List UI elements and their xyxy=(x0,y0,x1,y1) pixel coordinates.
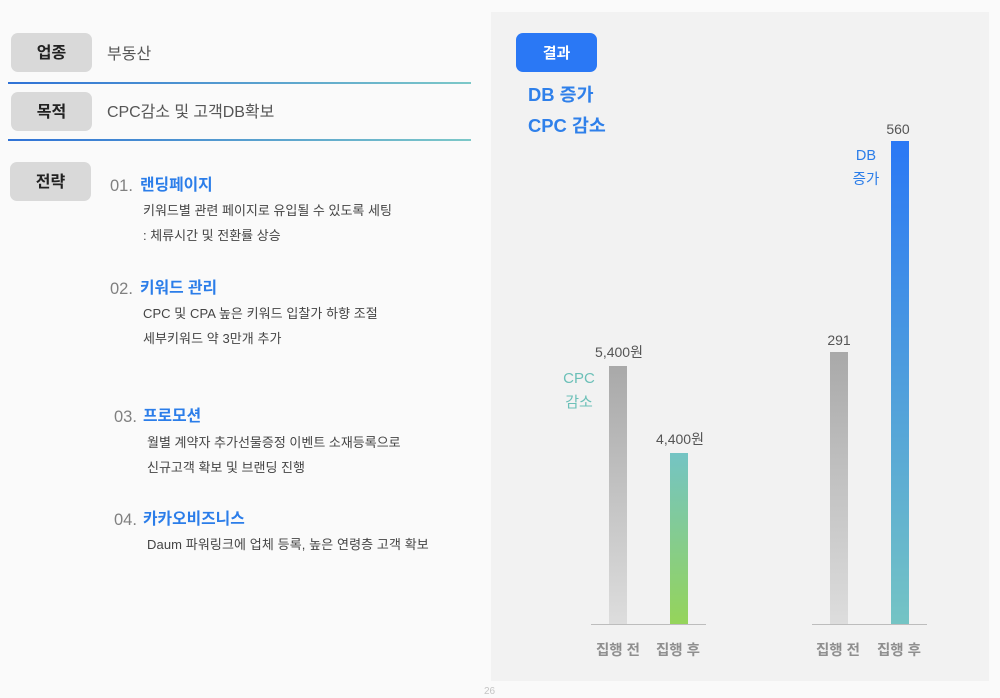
bar: DB after xyxy=(891,141,909,624)
strategy 02 xyxy=(110,279,378,346)
heading: strategy 01 xyxy=(110,176,213,195)
axis label: after: 집행 후 xyxy=(877,643,921,659)
heading: strategy 02: 키워드 관리 xyxy=(140,280,217,297)
text: strategy 02 details: 세부키워드 약 3만개 추가 xyxy=(143,331,282,346)
text: industry value: 부동산 xyxy=(107,46,151,63)
heading: strategy 04 xyxy=(114,510,245,529)
text: strategy 01 details xyxy=(143,203,392,243)
tag: objective: 목적 xyxy=(37,104,66,121)
heading: strategy 03: 03. xyxy=(114,408,137,426)
heading: strategy 03: 프로모션 xyxy=(143,408,201,425)
heading: strategy 01: 랜딩페이지 xyxy=(140,177,213,194)
value: DB before: 291 xyxy=(827,332,851,348)
axis label: after: 집행 후 xyxy=(656,643,700,659)
label: CPC decrease xyxy=(563,370,595,411)
text: strategy 03 details xyxy=(147,435,401,475)
chart: DB increase xyxy=(830,141,909,624)
strategy 01 xyxy=(110,176,392,243)
text: result summary: DB 증가 xyxy=(528,84,594,105)
text: result summary xyxy=(528,84,606,136)
value: CPC before: 5,400원 xyxy=(595,344,643,360)
tag: results: 결과 xyxy=(543,45,570,62)
tag: objective xyxy=(11,92,92,131)
label: CPC decrease: CPC xyxy=(563,370,595,387)
tag: results xyxy=(516,33,597,72)
value: DB after: 560 xyxy=(886,121,910,137)
tag: industry xyxy=(11,33,92,72)
text: strategy 01 details: 키워드별 관련 페이지로 유입될 수 있도록 세팅 xyxy=(143,203,392,218)
tag: industry: 업종 xyxy=(37,45,66,62)
label: DB increase xyxy=(853,148,879,188)
text: strategy 01 details: : 체류시간 및 전환률 상승 xyxy=(143,228,281,243)
text: strategy 02 details: CPC 및 CPA 높은 키워드 입찰가 하향 조절 xyxy=(143,306,378,321)
tag: strategy xyxy=(10,162,91,201)
text: strategy 03 details: 신규고객 확보 및 브랜딩 진행 xyxy=(147,460,305,475)
strategy 04 xyxy=(114,510,429,552)
heading: strategy 02: 02. xyxy=(110,280,133,298)
text: objective value: CPC감소 및 고객DB확보 xyxy=(107,104,274,121)
label: DB increase: 증가 xyxy=(853,172,879,188)
strategy 03 xyxy=(114,408,401,475)
axis label: before: 집행 전 xyxy=(816,643,860,659)
heading: strategy 01: 01. xyxy=(110,177,133,195)
chart: CPC decrease xyxy=(609,366,688,624)
heading: strategy 03 xyxy=(114,408,201,426)
text: strategy 04 details: Daum 파워링크에 업체 등록, 높은 연령층 고객 확보 xyxy=(147,537,429,552)
value: CPC after: 4,400원 xyxy=(656,431,704,447)
text: strategy 02 details xyxy=(143,306,378,346)
panel: results xyxy=(491,12,989,681)
label: DB increase: DB xyxy=(856,148,876,164)
axis label: before: 집행 전 xyxy=(596,643,640,659)
heading: strategy 04: 카카오비즈니스 xyxy=(143,511,245,528)
text: result summary: CPC 감소 xyxy=(528,115,606,136)
label: CPC decrease: 감소 xyxy=(565,394,593,411)
bar: CPC before xyxy=(609,366,627,624)
heading: strategy 02 xyxy=(110,279,217,298)
bar: DB before xyxy=(830,352,848,624)
tag: strategy: 전략 xyxy=(36,174,65,191)
bar: CPC after xyxy=(670,453,688,624)
text: strategy 03 details: 월별 계약자 추가선물증정 이벤트 소재등록으로 xyxy=(147,435,401,450)
panel: project summary xyxy=(10,33,429,552)
heading: strategy 04: 04. xyxy=(114,511,137,529)
page number: 26 xyxy=(484,686,495,697)
